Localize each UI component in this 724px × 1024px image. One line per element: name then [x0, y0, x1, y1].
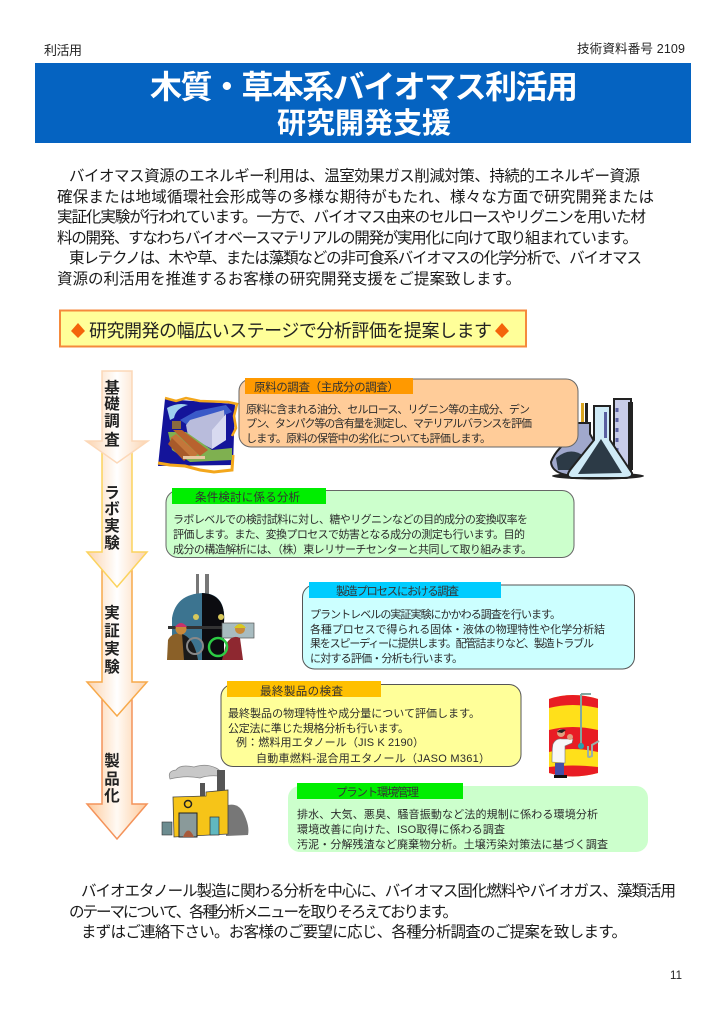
- document number: 技術資料番号 2109: [577, 41, 685, 56]
- callout heading: [60, 310, 526, 346]
- panel heading: [245, 378, 413, 394]
- arrow: demonstration stage: 実: [104, 640, 120, 658]
- arrow: lab stage: ラ: [104, 485, 120, 502]
- panel text: 各種プロセスで得られる固体・液体の物理特性や化学分析結: [310, 622, 605, 636]
- arrow: product stage: 化: [104, 787, 120, 805]
- panel text: 果をスピーディーに提供します。配管詰まりなど、製造トラブル: [310, 636, 594, 650]
- icon: lumber yard: [158, 398, 237, 472]
- panel heading: [172, 488, 326, 504]
- panel heading: 製造プロセスにおける調査: [336, 584, 460, 598]
- panel text: プラントレベルの実証実験にかかわる調査を行います。: [310, 607, 561, 621]
- arrow: demonstration stage: 証: [104, 622, 120, 640]
- arrow: product stage: [87, 690, 147, 839]
- arrow: demonstration stage: 験: [104, 658, 120, 676]
- left diamond: [71, 323, 85, 338]
- icon: tank with scientist: [549, 694, 599, 778]
- panel text: プン、タンパク等の含有量を測定し、マテリアルバランスを評価: [246, 416, 532, 430]
- intro text: 資源の利活用を推進するお客様の研究開発支援をご提案致します。: [57, 270, 521, 288]
- icon: flasks: [551, 399, 644, 480]
- closing text: [69, 882, 676, 941]
- arrow: product stage: 品: [104, 771, 120, 788]
- panel text: [310, 607, 605, 665]
- arrow: basic research stage: 礎: [104, 395, 120, 413]
- arrow: basic research stage: 査: [104, 431, 120, 449]
- closing text: バイオエタノール製造に関わる分析を中心に、バイオマス固化燃料やバイオガス、藻類活用: [81, 882, 676, 900]
- panel heading: 原料の調査（主成分の調査）: [254, 380, 399, 394]
- panel text: に対する評価・分析も行います。: [310, 651, 463, 665]
- intro text: 東レテクノは、木や草、または藻類などの非可食系バイオマスの化学分析で、バイオマス: [69, 249, 642, 267]
- panel text: 最終製品の物理特性や成分量について評価します。: [228, 706, 480, 720]
- icon: plant workers: [167, 574, 254, 660]
- panel: conditions: [166, 488, 574, 558]
- panel heading: 最終製品の検査: [260, 684, 344, 698]
- category label: 利活用: [44, 43, 82, 58]
- arrow: lab stage: 実: [104, 517, 120, 535]
- arrow: basic research stage: [86, 371, 148, 463]
- panel text: 成分の構造解析には、（株）東レリサーチセンターと共同して取り組みます。: [173, 542, 532, 556]
- panel text: 環境改善に向けた、ISO取得に係わる調査: [297, 822, 505, 836]
- panel text: 評価します。また、変換プロセスで妨害となる成分の測定も行います。目的: [173, 527, 525, 541]
- panel: plant environment: [288, 783, 648, 852]
- panel text: 汚泥・分解残渣など廃棄物分析。土壌汚染対策法に基づく調査: [297, 837, 608, 851]
- panel text: 公定法に準じた規格分析も行います。: [228, 721, 409, 735]
- arrow: demonstration stage: 実: [104, 604, 120, 622]
- right diamond: [495, 323, 509, 338]
- arrow: product stage: 製: [104, 752, 120, 770]
- panel text: 自動車燃料-混合用エタノール（JASO M361）: [256, 751, 490, 765]
- arrow: basic research stage: 基: [104, 379, 120, 397]
- page number: 11: [670, 970, 682, 982]
- panel text: [228, 706, 490, 765]
- closing text: のテーマについて、各種分析メニューを取りそろえております。: [69, 903, 458, 921]
- panel text: [173, 512, 532, 556]
- panel: raw materials: [239, 378, 578, 447]
- icon: recycling factory: [162, 765, 248, 837]
- panel: manufacturing process: [302, 582, 634, 669]
- title banner: [35, 63, 691, 143]
- arrow: basic research stage: 調: [104, 412, 120, 430]
- main title: 木質・草本系バイオマス利活用: [150, 69, 578, 105]
- panel text: します。原料の保管中の劣化についても評価します。: [246, 431, 491, 445]
- callout text: 研究開発の幅広いステージで分析評価を提案します: [89, 321, 492, 341]
- arrow: demonstration stage: [87, 570, 147, 716]
- panel text: [246, 402, 532, 445]
- subtitle: 研究開発支援: [277, 107, 451, 140]
- panel text: [297, 807, 608, 851]
- arrow: lab stage: 験: [104, 534, 120, 552]
- intro text: 確保または地域循環社会形成等の多様な期待がもたれ、様々な方面で研究開発または: [57, 188, 654, 206]
- intro text: バイオマス資源のエネルギー利用は、温室効果ガス削減対策、持続的エネルギー資源: [69, 167, 640, 185]
- panel text: 例：燃料用エタノール（JIS K 2190）: [236, 735, 424, 749]
- intro text: 実証化実験が行われています。一方で、バイオマス由来のセルロースやリグニンを用いた材: [57, 208, 646, 226]
- panel heading: [227, 681, 381, 698]
- panel text: 原料に含まれる油分、セルロース、リグニン等の主成分、デン: [246, 402, 530, 416]
- panel: final product: [221, 681, 521, 766]
- panel heading: プラント環境管理: [336, 785, 420, 799]
- panel text: 排水、大気、悪臭、騒音振動など法的規制に係わる環境分析: [297, 807, 598, 821]
- intro text: 料の開発、すなわちバイオベースマテリアルの開発が実用化に向けて取り組まれています。: [57, 229, 638, 247]
- panel heading: 条件検討に係る分析: [195, 490, 300, 504]
- panel text: ラボレベルでの検討試料に対し、糖やリグニンなどの目的成分の変換収率を: [173, 512, 528, 526]
- panel heading: [297, 783, 463, 799]
- arrow: lab stage: [87, 450, 147, 587]
- intro text: [57, 167, 654, 288]
- panel heading: [309, 582, 501, 598]
- closing text: まずはご連絡下さい。お客様のご要望に応じ、各種分析調査のご提案を致します。: [81, 923, 627, 941]
- arrow: lab stage: ボ: [104, 500, 120, 518]
